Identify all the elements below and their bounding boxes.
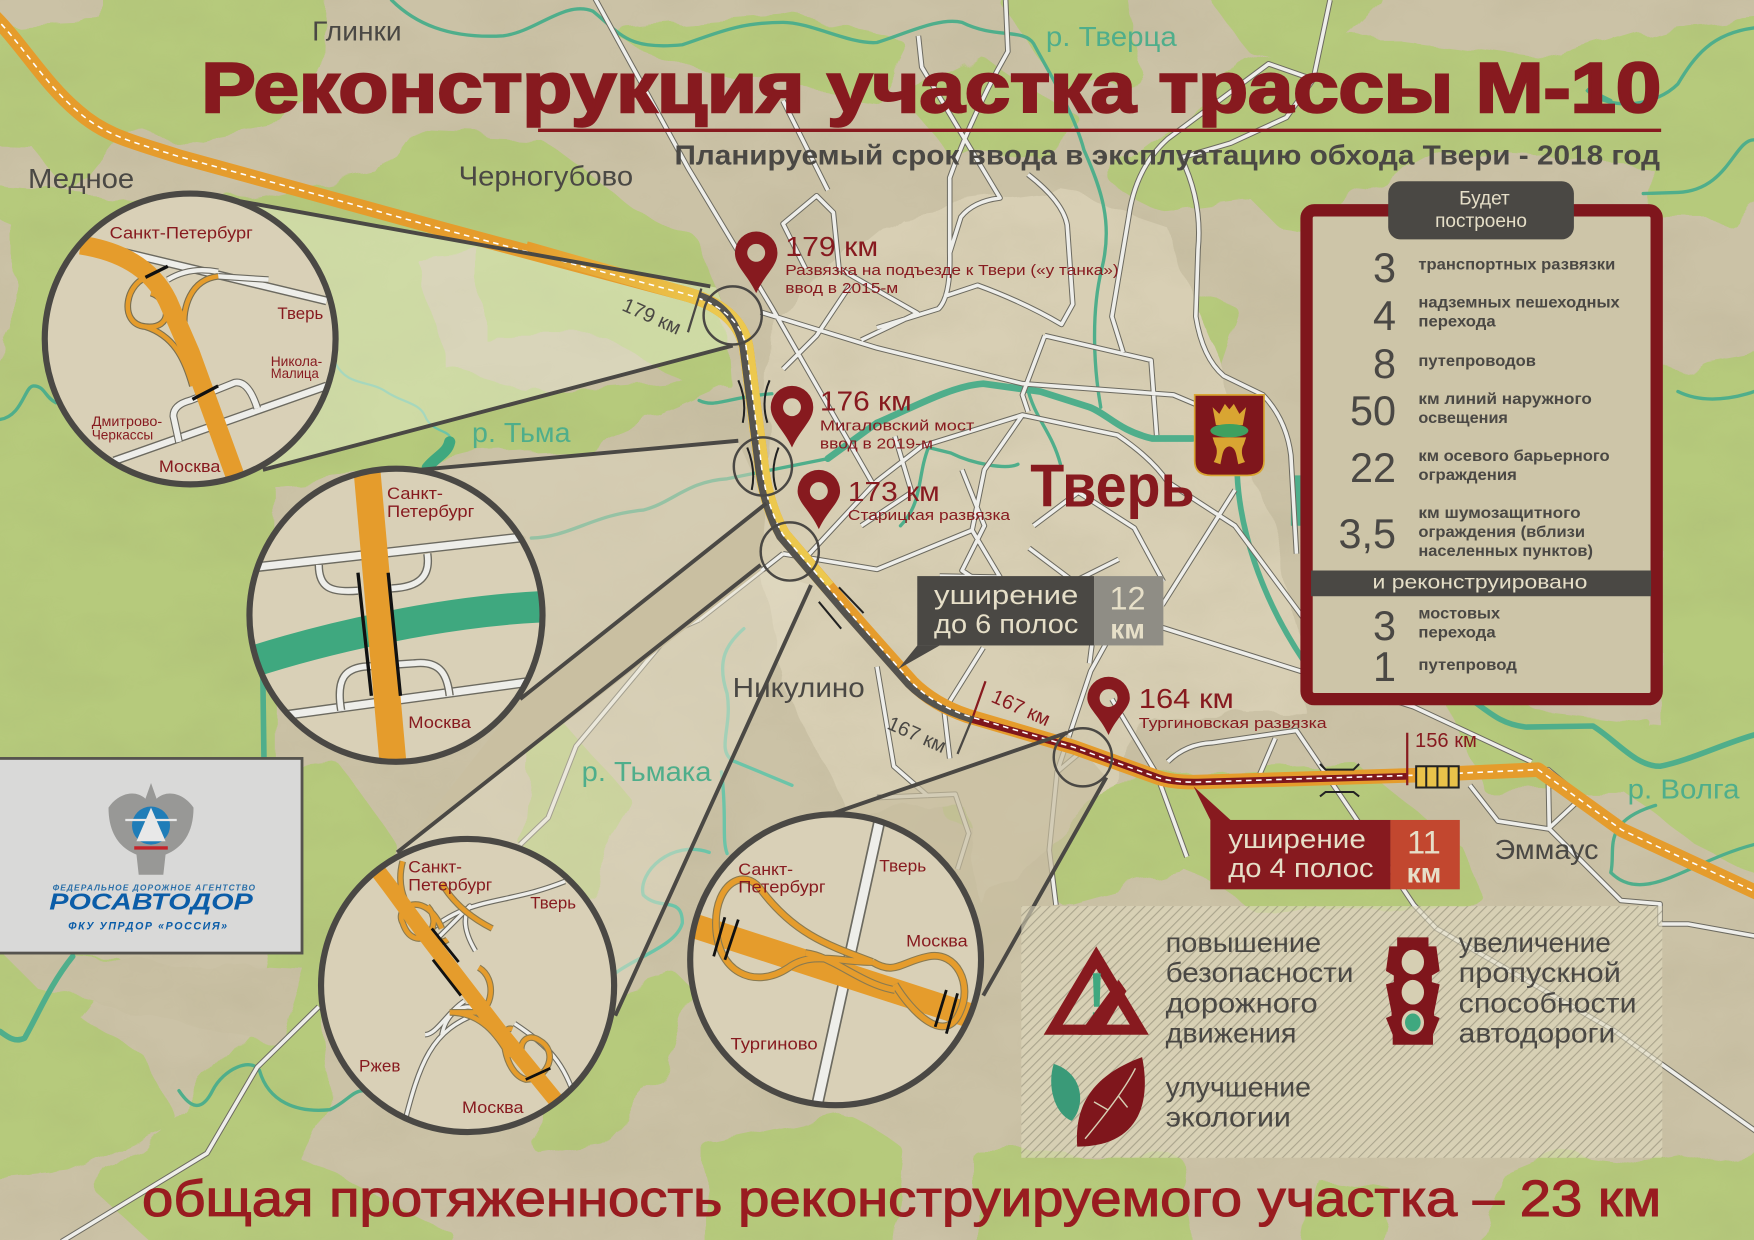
km ticks: 179 км (619, 294, 684, 340)
km ticks: 167 км (884, 713, 949, 758)
bottom total length line: общая протяженность реконструируемого участка – 23 км (142, 1169, 1661, 1227)
text: ecology: экологии (1166, 1101, 1291, 1132)
callout: widening to 4 lanes: до 4 полос (1228, 853, 1374, 883)
text: safety: движения (1166, 1018, 1296, 1049)
pin 173 km: 173 км (848, 476, 940, 507)
pin 176 km (771, 386, 974, 453)
circle 4: Turginovo interchange: Санкт- (738, 861, 793, 879)
callout: widening to 4 lanes: уширение (1228, 824, 1366, 854)
reconstructed rows: мостовых (1418, 606, 1500, 623)
circle 1: 179 km interchange: Малица (271, 366, 319, 381)
panel: what will be built (1307, 181, 1657, 699)
circle 3: Staritskaya interchange (321, 839, 614, 1132)
text: capacity: автодороги (1459, 1018, 1615, 1049)
place names: Никулино (733, 672, 865, 703)
reconstructed band: и реконструировано (1373, 572, 1587, 593)
circle 1: 179 km interchange: Санкт-Петербург (110, 224, 253, 242)
circle 4: Turginovo interchange: Петербург (738, 879, 826, 897)
panel rows: надземных пешеходных (1418, 295, 1620, 312)
circle 1: 179 km interchange: Тверь (277, 305, 323, 323)
callout: widening to 6 lanes: до 6 полос (934, 609, 1078, 639)
panel header (1388, 181, 1574, 239)
river names: р. Тьмака (582, 756, 712, 787)
panel rows: 3 (1373, 245, 1396, 291)
callout: widening to 6 lanes (898, 576, 1163, 669)
pin 164 km: Тургиновская развязка (1139, 715, 1327, 732)
reconstructed rows: перехода (1418, 625, 1496, 642)
panel rows: перехода (1418, 314, 1496, 331)
circle 3: Staritskaya interchange: Петербург (408, 876, 492, 894)
circle 1: 179 km interchange (45, 194, 336, 484)
circle 3: Staritskaya interchange: Москва (462, 1099, 525, 1117)
reconstructed rows: путепровод (1418, 657, 1517, 674)
callout: widening to 4 lanes (1194, 786, 1460, 889)
pin 179 km: ввод в 2015-м (785, 280, 898, 297)
icon: warning triangle (1044, 946, 1149, 1035)
pin 179 km: 179 км (785, 231, 878, 262)
circle 4: Turginovo interchange (685, 814, 984, 1107)
text: safety (1166, 927, 1354, 1049)
text: capacity (1459, 927, 1637, 1049)
reconstructed rows (1373, 603, 1517, 690)
text: safety: безопасности (1166, 957, 1354, 988)
circle 1: 179 km interchange: Никола- (271, 354, 322, 369)
panel rows: 8 (1373, 341, 1396, 387)
circle 1: 179 km interchange: Дмитрово- (92, 414, 162, 429)
magnifier cones (213, 196, 1106, 1016)
circle 2: Migalovsky bridge: Москва (408, 714, 472, 732)
highway M-10 (0, 17, 1754, 895)
circle 4: Turginovo interchange: Тургиново (730, 1035, 818, 1053)
circle 1: 179 km interchange: Москва (159, 458, 221, 476)
callout: widening to 4 lanes: 11 (1407, 825, 1441, 861)
pin 164 km (1087, 677, 1327, 735)
text: ecology: улучшение (1166, 1071, 1311, 1102)
callout: widening to 6 lanes: 12 (1110, 581, 1146, 617)
text: capacity: увеличение (1459, 927, 1611, 958)
callout: widening to 6 lanes: уширение (934, 580, 1078, 610)
panel rows: км осевого барьерного (1418, 448, 1610, 465)
pin 173 km: Старицкая развязка (848, 507, 1011, 524)
pin 179 km (735, 231, 1119, 297)
small zoom circles (704, 286, 1112, 786)
text: capacity: пропускной (1459, 957, 1621, 988)
circle 4: Turginovo interchange: Тверь (879, 857, 926, 875)
circle 3: Staritskaya interchange: Ржев (359, 1058, 400, 1076)
km ticks (619, 289, 1477, 785)
circle 1: 179 km interchange: Черкассы (92, 428, 153, 443)
pin 176 km: Мигаловский мост (820, 418, 974, 435)
place names (28, 15, 1599, 865)
place names: Черногубово (459, 161, 633, 192)
logo panel: ФЕДЕРАЛЬНОЕ ДОРОЖНОЕ АГЕНТСТВО (53, 882, 256, 892)
panel rows: ограждения (1418, 467, 1517, 484)
text: capacity: способности (1459, 987, 1637, 1018)
river names (472, 21, 1740, 805)
river names: р. Волга (1628, 774, 1740, 805)
panel rows: 4 (1373, 293, 1396, 339)
panel rows: освещения (1418, 410, 1508, 427)
bridge marks and toll ladder (738, 380, 1459, 796)
circle 2: Migalovsky bridge (241, 469, 554, 772)
panel rows: 22 (1350, 445, 1396, 491)
benefits panel (1021, 906, 1662, 1158)
circle 2: Migalovsky bridge: Петербург (387, 503, 474, 521)
title underline (538, 129, 1661, 132)
place names: Эммаус (1494, 834, 1599, 865)
river names: р. Тверца (1046, 21, 1177, 52)
circle 3: Staritskaya interchange: Санкт- (408, 859, 462, 877)
title: Реконструкция участка трассы М-10 (201, 48, 1661, 127)
km ticks: 156 км (1415, 730, 1477, 752)
magnifier cone outlines (241, 201, 1106, 1016)
text: ecology (1166, 1071, 1311, 1132)
circle 3: Staritskaya interchange: Тверь (530, 894, 576, 912)
reconstructed rows: 3 (1373, 603, 1396, 649)
panel rows: ограждения (вблизи (1418, 524, 1585, 541)
panel rows: путепроводов (1418, 353, 1536, 370)
pin 173 km (798, 470, 1011, 529)
subtitle: Планируемый срок ввода в эксплуатацию обхода Твери - 2018 год (675, 139, 1660, 170)
reconstructed band (1311, 571, 1651, 596)
panel rows: 3,5 (1339, 511, 1396, 557)
km ticks: 167 км (988, 686, 1053, 731)
panel rows (1339, 245, 1620, 560)
place names: Глинки (312, 15, 402, 46)
icon: traffic light (1386, 937, 1440, 1045)
logo panel: РОСАВТОДОР (49, 888, 253, 914)
city label Tver: Тверь (1030, 452, 1195, 520)
text: safety: дорожного (1166, 987, 1318, 1018)
pin 164 km: 164 км (1139, 683, 1234, 714)
coat of arms (1195, 395, 1264, 475)
emblem (109, 783, 194, 875)
river names: р. Тьма (472, 417, 571, 448)
panel rows: 50 (1350, 388, 1396, 434)
logo panel: ФКУ УПРДОР «РОССИЯ» (68, 921, 227, 933)
callout: widening to 6 lanes: км (1110, 614, 1145, 645)
panel rows: км линий наружного (1418, 391, 1592, 408)
reconstructed rows: 1 (1373, 644, 1396, 690)
pin 176 km: ввод в 2019-м (820, 436, 933, 453)
pin 179 km: Развязка на подъезде к Твери («у танка») (785, 262, 1119, 279)
panel rows: транспортных развязки (1418, 257, 1615, 274)
text: safety: повышение (1166, 927, 1321, 958)
panel rows: км шумозащитного (1418, 505, 1581, 522)
callout: widening to 4 lanes: км (1407, 858, 1441, 889)
circle 2: Migalovsky bridge: Санкт- (387, 485, 443, 503)
circle 4: Turginovo interchange: Москва (906, 932, 969, 950)
panel header: построено (1435, 211, 1527, 232)
logo panel (0, 758, 302, 953)
panel header: Будет (1459, 189, 1510, 210)
pin 176 km: 176 км (820, 386, 912, 417)
panel rows: населенных пунктов) (1418, 543, 1593, 560)
icon: leaves (1051, 1057, 1145, 1147)
place names: Медное (28, 163, 134, 194)
